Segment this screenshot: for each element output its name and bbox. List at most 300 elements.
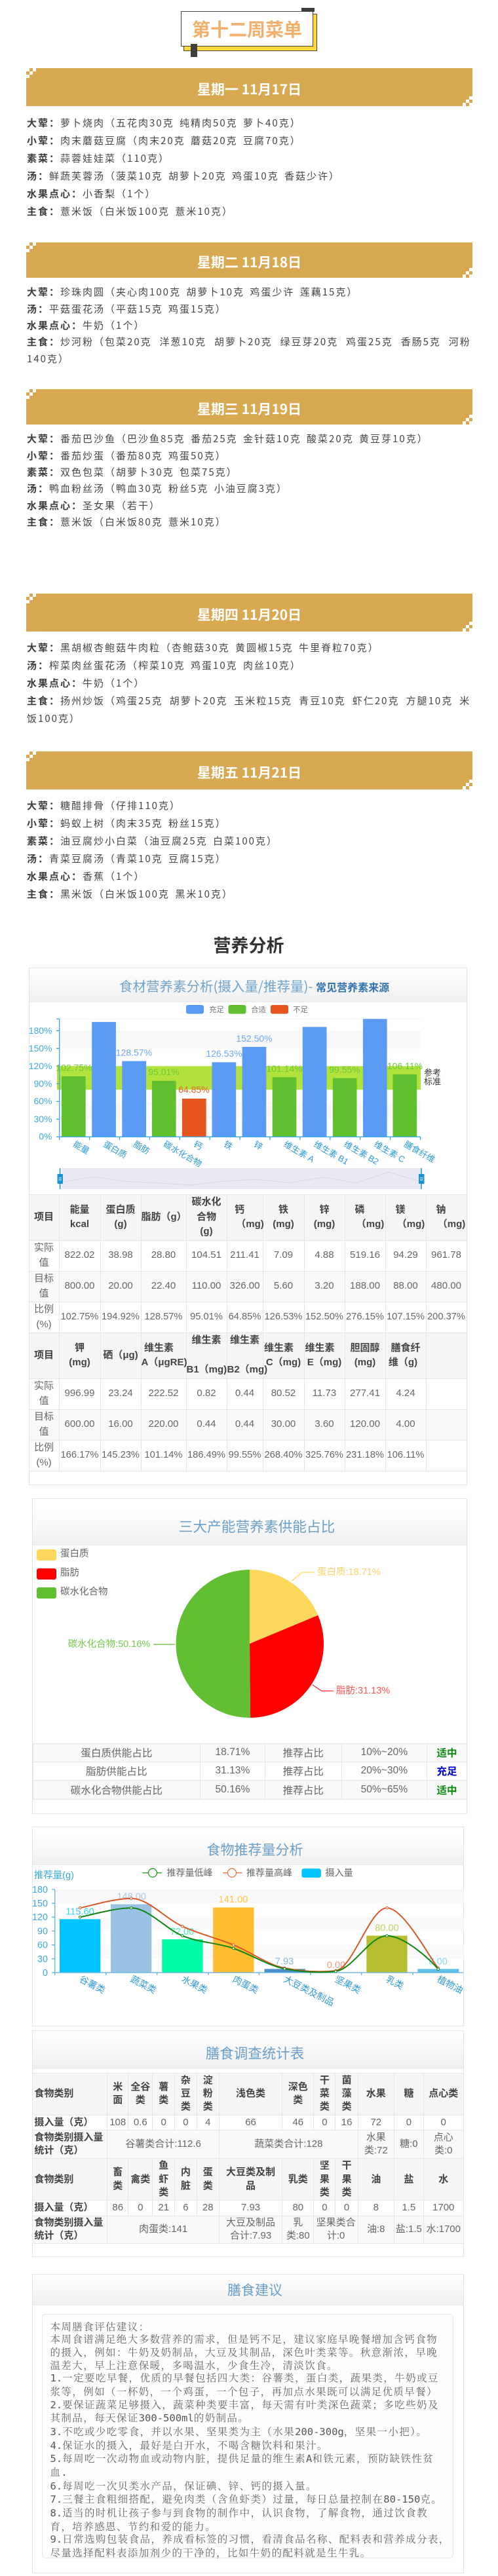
table: dietary survey: 菌 [342, 2075, 352, 2086]
legend: macronutrients: 蛋白质 [60, 1549, 89, 1559]
line: recommended high [79, 1897, 439, 1972]
y-axis labels: 0% [39, 1131, 52, 1141]
table: energy share recommendations: 充足 [436, 1766, 457, 1777]
table: nutrient values: 200.37% [427, 1312, 465, 1322]
table: energy share recommendations: 18.71% [215, 1747, 250, 1758]
banner: Friday [26, 751, 472, 789]
text block: Wednesday menu: 大荤：番茄巴沙鱼（巴沙鱼85克 番茄25克 金针菇10克 酸菜20克 黄豆芽10克） [27, 432, 429, 445]
table: nutrient values: 107.15% [387, 1312, 425, 1322]
table: dietary survey: 0 [161, 2117, 166, 2128]
text block: Tuesday menu [27, 285, 471, 366]
table: dietary survey: 禽类 [130, 2174, 150, 2185]
bars [60, 1904, 459, 1973]
text block: Tuesday menu: 汤：平菇蛋花汤（平菇15克 鸡蛋15克） [27, 302, 227, 316]
table: nutrient values: （mg) [356, 1219, 384, 1230]
x-axis labels [71, 1139, 437, 1169]
banner: Thursday [26, 594, 472, 632]
table: nutrient values: B1（mg) [186, 1364, 227, 1375]
table: dietary survey: 谷薯类合计:112.6 [125, 2138, 201, 2150]
table: nutrient values: 276.15% [346, 1312, 384, 1322]
data labels: 7.93 [275, 1956, 294, 1967]
table: nutrient values: 16.00 [108, 1418, 133, 1430]
text block: Friday menu: 水果点心：香蕉（1个） [27, 869, 145, 883]
text block: Wednesday menu: 汤：鸭血粉丝汤（鸭血30克 粉丝5克 小油豆腐3克） [27, 482, 288, 495]
table: nutrient values: 211.41 [230, 1249, 259, 1260]
table: nutrient values: 实际 [34, 1242, 54, 1253]
table: nutrient values: 磷 [354, 1204, 364, 1215]
table: nutrient values: 钙 [235, 1204, 244, 1215]
table: energy share recommendations: 推荐占比 [283, 1785, 324, 1796]
bars [62, 1019, 417, 1137]
table: dietary survey: 80 [292, 2202, 303, 2213]
table: dietary survey: 水 [438, 2174, 448, 2185]
slice: fat [250, 1616, 324, 1718]
table: nutrient values: 120.00 [350, 1418, 380, 1430]
data labels: 106.11% [387, 1061, 423, 1071]
table: dietary survey: 乳类 [288, 2174, 308, 2185]
reference label [424, 1068, 441, 1086]
table: nutrient values: 23.24 [108, 1388, 133, 1399]
legend [186, 1005, 308, 1014]
label: protein [292, 1566, 381, 1581]
table: dietary survey: 蔬菜类合计:128 [254, 2138, 322, 2150]
x-axis labels: 维生素 C [372, 1139, 407, 1165]
table: nutrient values: 38.98 [108, 1249, 133, 1260]
text block: Wednesday menu: 素菜：双色包菜（胡萝卜30克 包菜75克） [27, 465, 238, 479]
table: dietary survey: 糖:0 [400, 2138, 418, 2150]
table: dietary survey: 0 [406, 2117, 412, 2128]
table: nutrient values: 822.02 [65, 1249, 94, 1260]
table: dietary survey: 淀 [203, 2075, 213, 2086]
text block: Thursday menu: 汤：榨菜肉丝蛋花汤（榨菜10克 鸡蛋10克 肉丝10克） [27, 658, 301, 672]
panel: nutrient analysis [29, 968, 467, 1485]
y-axis labels: 0 [43, 1968, 48, 1979]
table: dietary survey: 深色 [288, 2081, 308, 2093]
x-axis labels: 维生素 A [282, 1139, 316, 1164]
table: nutrient values: 目标 [34, 1273, 54, 1284]
table: dietary survey: 108 [109, 2117, 126, 2128]
data zoom slider [58, 1168, 425, 1189]
table: nutrient values: (g) [200, 1226, 213, 1237]
y-axis labels: 180 [32, 1885, 48, 1895]
slice: carbohydrate [176, 1570, 250, 1718]
table: dietary survey: 0 [138, 2202, 143, 2213]
text block: Wednesday menu [27, 432, 429, 529]
line: recommended low [79, 1906, 439, 1973]
table: dietary survey: 藻 [342, 2088, 352, 2099]
table: dietary survey: 食物类别摄入量 [34, 2217, 103, 2228]
x-axis labels: 膳食纤维 [402, 1139, 437, 1165]
text block: Monday menu: 汤：鲜蔬芙蓉汤（菠菜10克 胡萝卜20克 鸡蛋10克 香菇少许） [27, 169, 340, 183]
table: nutrient values: 480.00 [431, 1280, 461, 1291]
table: dietary survey: 干 [320, 2075, 330, 2086]
table: dietary survey: 米 [113, 2081, 123, 2093]
table: nutrient values: 蛋白质 [105, 1204, 135, 1215]
x-axis labels: 坚果类 [334, 1973, 362, 1996]
table: dietary survey: 油 [371, 2174, 381, 2185]
table: energy share recommendations [33, 1743, 467, 1800]
panel header: macronutrient energy share [33, 1499, 467, 1545]
table: dietary survey: 0 [441, 2117, 446, 2128]
table: dietary survey: 类 [136, 2094, 145, 2106]
y-axis labels: 90% [33, 1078, 52, 1089]
table: dietary survey: 菜 [320, 2088, 330, 2099]
x-axis labels [78, 1973, 465, 2008]
legend: 推荐量高峰 [246, 1867, 292, 1878]
table: dietary survey: 6 [183, 2202, 189, 2213]
table: dietary survey: 66 [245, 2117, 256, 2128]
table: dietary survey: 86 [112, 2202, 123, 2213]
table: dietary survey: 畜 [113, 2167, 123, 2178]
banner: Friday: 星期五 11月21日 [197, 763, 301, 782]
table: dietary survey: 薯 [159, 2081, 168, 2093]
table: nutrient values: 维生素 [230, 1335, 259, 1346]
table: dietary survey: 46 [292, 2117, 303, 2128]
label: carbohydrate: 碳水化合物:50.16% [68, 1638, 150, 1650]
table: nutrient values: 145.23% [102, 1450, 140, 1460]
table: nutrient values: 5.60 [274, 1280, 293, 1291]
data labels [66, 1892, 448, 1971]
table: dietary survey: 4 [205, 2117, 210, 2128]
table: dietary survey: 食物类别摄入量 [34, 2132, 103, 2143]
text block: Friday menu: 小荤：蚂蚁上树（肉末35克 粉丝15克） [27, 816, 227, 829]
table: nutrient values: 钠 [436, 1204, 446, 1215]
table: dietary survey: 0 [344, 2202, 349, 2213]
legend: macronutrients: 碳水化合物 [60, 1587, 107, 1597]
legend: 合适 [251, 1005, 266, 1014]
table: dietary survey: 点心 [434, 2132, 453, 2143]
table: nutrient values: 166.17% [60, 1450, 98, 1460]
text block: Wednesday menu: 主食：薏米饭（白米饭80克 薏米10克） [27, 515, 227, 529]
table: nutrient values: 99.55% [229, 1450, 261, 1460]
axes [52, 1889, 464, 1975]
table: dietary survey: 杂 [181, 2075, 191, 2086]
table: nutrient values: 106.11% [387, 1450, 424, 1460]
table: nutrient values: 102.75% [60, 1312, 98, 1322]
table: nutrient values: 胆固醇 [350, 1342, 380, 1354]
table: nutrient values: 钾 [75, 1342, 85, 1354]
table: dietary survey: 坚 [320, 2160, 330, 2171]
table: dietary survey: 类 [203, 2101, 213, 2112]
legend: 摄入量 [326, 1867, 353, 1878]
table: dietary survey: 盐 [404, 2174, 413, 2185]
y-axis labels: 30% [33, 1114, 52, 1124]
table: dietary survey: 食物类别 [34, 2088, 73, 2099]
data labels: 115.60 [66, 1906, 94, 1917]
data labels: 0.00 [327, 1960, 345, 1971]
table: dietary survey: 0 [322, 2117, 328, 2128]
table: energy share recommendations: 适中 [436, 1748, 457, 1759]
table: nutrient values: 64.85% [229, 1312, 261, 1322]
table: dietary survey: 全谷 [130, 2081, 150, 2093]
table: dietary survey: 8 [374, 2202, 379, 2213]
legend: macronutrients [37, 1548, 107, 1599]
table: nutrient values: 镁 [395, 1204, 405, 1215]
table: energy share recommendations: 推荐占比 [283, 1766, 324, 1777]
table: dietary survey: 类 [320, 2187, 330, 2198]
table: dietary survey: 肉蛋类:141 [139, 2224, 187, 2235]
table: nutrient values: 值 [39, 1426, 48, 1437]
y-axis labels: 90 [37, 1926, 48, 1937]
table: nutrient values: 800.00 [65, 1280, 94, 1291]
table: dietary survey: 类 [320, 2101, 330, 2112]
table: nutrient values: (mg) [273, 1219, 294, 1230]
x-axis labels: 维生素 B2 [342, 1139, 380, 1167]
table: nutrient values: 104.51 [191, 1249, 221, 1260]
legend: 充足 [209, 1005, 224, 1014]
table: dietary survey: 类 [113, 2180, 123, 2191]
data labels: 101.14% [266, 1063, 303, 1074]
chart title: 三大产能营养素供能占比 [179, 1516, 335, 1536]
table: energy share recommendations: 蛋白质供能占比 [81, 1748, 152, 1759]
table: energy share recommendations: 31.13% [215, 1765, 250, 1776]
table: dietary survey: 16 [341, 2117, 352, 2128]
table: dietary survey: 摄入量（克） [34, 2202, 93, 2213]
table: nutrient values: 220.00 [149, 1418, 178, 1430]
y-axis labels: 150% [29, 1043, 52, 1053]
table: nutrient values: 30.00 [271, 1418, 296, 1430]
table: nutrient values: 101.14% [144, 1450, 182, 1460]
legend [142, 1867, 353, 1878]
x-axis labels: 谷薯类 [78, 1973, 107, 1996]
table: dietary survey: 虾 [159, 2174, 168, 2185]
x-axis labels: 维生素 B1 [312, 1139, 351, 1167]
table: dietary survey: 0.6 [134, 2117, 147, 2128]
table: nutrient values: 600.00 [65, 1418, 94, 1430]
table: nutrient values: 222.52 [149, 1388, 178, 1399]
table: nutrient values: 0.44 [235, 1418, 254, 1430]
text block: Friday menu: 素菜：油豆腐炒小白菜（油豆腐25克 白菜100克） [27, 833, 278, 848]
table: dietary survey: 水果 [366, 2132, 386, 2143]
table: nutrient values: (%) [36, 1457, 52, 1468]
table: dietary survey: 类 [293, 2094, 303, 2106]
table: dietary survey: 统计（克） [34, 2230, 83, 2241]
table: nutrient values: 维（g) [389, 1357, 417, 1368]
table: dietary survey: 类 [203, 2180, 213, 2191]
table: dietary survey: 21 [158, 2202, 169, 2213]
reference label: 标准 [424, 1077, 441, 1086]
table: dietary survey: 类:80 [286, 2230, 310, 2241]
table: nutrient values: 实际 [34, 1380, 54, 1392]
text block: Friday menu [27, 798, 278, 900]
text block: Tuesday menu: 140克） [27, 352, 69, 366]
table: nutrient values: 碳水化 [191, 1196, 221, 1207]
table: nutrient values: B2（mg) [227, 1364, 267, 1375]
table: nutrient values: （mg) [438, 1219, 465, 1230]
y-axis labels: 30 [37, 1954, 48, 1965]
bar chart: nutrient ratio [29, 1005, 441, 1189]
chart title: 食材营养素分析(摄入量/推荐量)- 常见营养素来源 [119, 975, 389, 995]
table: dietary survey: 7.93 [241, 2202, 260, 2213]
table: dietary survey: 水果 [366, 2088, 386, 2099]
table: nutrient values: 3.60 [315, 1418, 334, 1430]
table: energy share recommendations: 适中 [436, 1785, 457, 1796]
panel header: nutrient analysis [29, 968, 467, 1002]
x-axis labels: 大豆类及制品 [282, 1973, 336, 2008]
banner: Monday [26, 68, 472, 106]
table: nutrient values: 94.29 [393, 1249, 418, 1260]
text block: Friday menu: 主食：黑米饭（白米饭100克 黑米10克） [27, 887, 233, 900]
text block: Thursday menu: 饭100克） [27, 711, 81, 725]
data labels: 95.01% [148, 1067, 180, 1077]
text block: Friday menu: 汤：青菜豆腐汤（青菜10克 豆腐15克） [27, 852, 227, 865]
table: nutrient values: 能量 [69, 1204, 89, 1215]
table: nutrient values: (%) [36, 1319, 52, 1330]
table: nutrient values: （mg) [397, 1219, 425, 1230]
y-axis title: 推荐量(g) [34, 1870, 74, 1881]
panel title: 膳食建议 [227, 2280, 282, 2300]
data labels: 72.00 [170, 1927, 194, 1937]
table: nutrient values: 0.44 [235, 1388, 254, 1399]
table: dietary survey: 内 [181, 2167, 191, 2178]
table: nutrient values: 项目 [34, 1350, 54, 1361]
table: nutrient values: 3.20 [315, 1280, 334, 1291]
data labels: 141.00 [219, 1895, 248, 1905]
table: nutrient values: 值 [39, 1288, 48, 1299]
text block: Tuesday menu: 主食：炒河粉（包菜20克 洋葱10克 胡萝卜20克 绿豆芽20克 鸡蛋25克 香肠5克 河粉 [27, 335, 471, 349]
table: nutrient values: E（mg) [307, 1357, 341, 1368]
table: dietary survey: 水:1700 [426, 2224, 461, 2235]
panel: food recommendation analysis [32, 1827, 464, 2026]
table: nutrient values: 326.00 [230, 1280, 259, 1291]
table: nutrient values [29, 1194, 467, 1471]
table title: 膳食调查统计表 [206, 2043, 304, 2063]
table: dietary survey [33, 2073, 463, 2244]
data labels: 80.00 [375, 1923, 399, 1934]
table: nutrient values: 维生素 [191, 1335, 221, 1346]
table: nutrient values: 维生素 [264, 1342, 294, 1354]
table: nutrient values: 277.41 [350, 1388, 380, 1399]
reference label: 参考 [424, 1068, 441, 1078]
table: nutrient values: kcal [70, 1219, 89, 1230]
x-axis labels: 乳类 [385, 1973, 406, 1991]
title: week 12 menu [181, 8, 317, 57]
y-axis labels: 60% [33, 1095, 52, 1106]
table: nutrient values: 维生素 [144, 1342, 174, 1354]
table: nutrient values: 110.00 [192, 1280, 221, 1291]
text block: Monday menu [27, 116, 340, 218]
pie chart: energy share [68, 1566, 390, 1718]
banner: Tuesday: 星期二 11月18日 [197, 252, 301, 272]
text block: Thursday menu: 大荤：黑胡椒杏鲍菇牛肉粒（杏鲍菇30克 黄圆椒15克 牛里脊粒70克） [27, 641, 379, 654]
table: nutrient values: 4.00 [396, 1418, 415, 1430]
x-axis labels: 碳水化合物 [162, 1139, 204, 1169]
banner: Wednesday [26, 389, 472, 425]
table: nutrient values: （mg) [236, 1219, 264, 1230]
data labels [56, 1033, 423, 1095]
text block: Wednesday menu: 水果点心：圣女果（若干） [27, 499, 161, 512]
table: dietary survey: 粉 [203, 2088, 213, 2099]
text block: Monday menu: 小荤：肉末蘑菇豆腐（肉末20克 蘑菇20克 豆腐70克） [27, 134, 301, 147]
table: nutrient values: (g) [114, 1219, 127, 1230]
table: nutrient values: 128.57% [144, 1312, 182, 1322]
table: nutrient values: 268.40% [265, 1450, 302, 1460]
y-axis labels: 60 [37, 1941, 48, 1951]
table: energy share recommendations: 20%~30% [361, 1765, 408, 1776]
legend: macronutrients: 脂肪 [60, 1568, 79, 1578]
advice box [42, 2314, 453, 2558]
table: dietary survey: 浅色类 [236, 2088, 265, 2099]
table: nutrient values: 项目 [34, 1211, 54, 1222]
table: dietary survey: 干 [342, 2160, 352, 2171]
table: dietary survey: 食物类别 [34, 2174, 73, 2185]
table: dietary survey: 类:72 [364, 2145, 388, 2156]
table: energy share recommendations: 10%~20% [361, 1747, 408, 1758]
table: dietary survey: 点心类 [429, 2088, 458, 2099]
table: dietary survey: 1700 [432, 2202, 454, 2213]
legend: 不足 [293, 1006, 308, 1014]
table: dietary survey: 糖 [404, 2088, 413, 2099]
table: nutrient values: 4.24 [396, 1388, 415, 1399]
x-axis labels: 肉蛋类 [231, 1973, 260, 1996]
table: nutrient values: (mg) [354, 1357, 375, 1368]
text block: Tuesday menu: 大荤：珍珠肉圆（夹心肉100克 胡萝卜10克 鸡蛋少许 莲藕15克） [27, 285, 358, 299]
label: protein: 蛋白质:18.71% [317, 1566, 381, 1578]
table: nutrient values: 硒（μg) [103, 1350, 138, 1361]
x-axis labels: 铁 [222, 1139, 234, 1152]
text block: Monday menu: 主食：薏米饭（白米饭100克 薏米10克） [27, 204, 233, 218]
table: dietary survey: 类 [181, 2101, 191, 2112]
table: dietary survey: 0 [183, 2117, 189, 2128]
table: dietary survey: 类:0 [434, 2145, 452, 2156]
x-axis labels: 植物油 [436, 1973, 465, 1996]
panel header: dietary advice [33, 2275, 463, 2305]
table: nutrient values: 194.92% [102, 1312, 140, 1322]
table: nutrient values: 996.99 [65, 1388, 94, 1399]
x-axis labels: 能量 [71, 1139, 91, 1156]
table: dietary survey: 品 [246, 2180, 256, 2191]
table: dietary survey: 大豆及制品 [226, 2217, 275, 2228]
table: nutrient values: A（μgRE) [142, 1357, 187, 1368]
x-axis labels: 锌 [252, 1139, 264, 1152]
table: dietary survey: 果 [342, 2174, 352, 2185]
table: dietary survey: 计:0 [327, 2230, 345, 2241]
table: dietary survey: 1.5 [402, 2202, 415, 2213]
table: dietary survey: 类 [159, 2187, 168, 2198]
table: nutrient values: 膳食纤 [391, 1342, 421, 1354]
table: energy share recommendations: 50%~65% [361, 1784, 408, 1795]
table: dietary survey: 油:8 [367, 2224, 385, 2235]
table: nutrient values: C（mg) [266, 1357, 301, 1368]
data labels: 148.00 [117, 1892, 146, 1903]
table: nutrient values: 325.76% [305, 1450, 343, 1460]
table: nutrient values: 231.18% [346, 1450, 384, 1460]
table: nutrient values: 比例 [34, 1304, 54, 1315]
table: energy share recommendations: 碳水化合物供能占比 [71, 1785, 163, 1796]
x-axis labels: 水果类 [180, 1973, 209, 1996]
data labels: 126.53% [206, 1048, 242, 1059]
data labels: 64.85% [178, 1084, 210, 1095]
y-axis labels: 150 [32, 1899, 48, 1909]
table: nutrient values: 28.80 [151, 1249, 176, 1260]
table: nutrient values: 维生素 [305, 1342, 334, 1354]
y-axis labels: 120 [32, 1912, 48, 1923]
table: dietary survey: 72 [370, 2117, 381, 2128]
data labels: 128.57% [116, 1047, 152, 1057]
table: energy share recommendations: 50.16% [215, 1784, 250, 1795]
label: fat: 脂肪:31.13% [336, 1685, 390, 1696]
table: nutrient values: 7.09 [274, 1249, 293, 1260]
text block: Thursday menu: 水果点心：牛奶（1个） [27, 676, 145, 690]
table: nutrient values: 11.73 [313, 1388, 336, 1399]
text block: Wednesday menu: 小荤：番茄炒蛋（番茄80克 鸡蛋50克） [27, 449, 227, 463]
table: dietary survey: 盐:1.5 [396, 2224, 422, 2235]
text block: Monday menu: 水果点心：小香梨（1个） [27, 187, 156, 200]
y-axis labels [32, 1885, 48, 1979]
table: dietary survey: 坚果类合 [316, 2217, 356, 2228]
heading: nutrition analysis: 营养分析 [214, 932, 284, 957]
table: nutrient values: (mg) [69, 1357, 90, 1368]
